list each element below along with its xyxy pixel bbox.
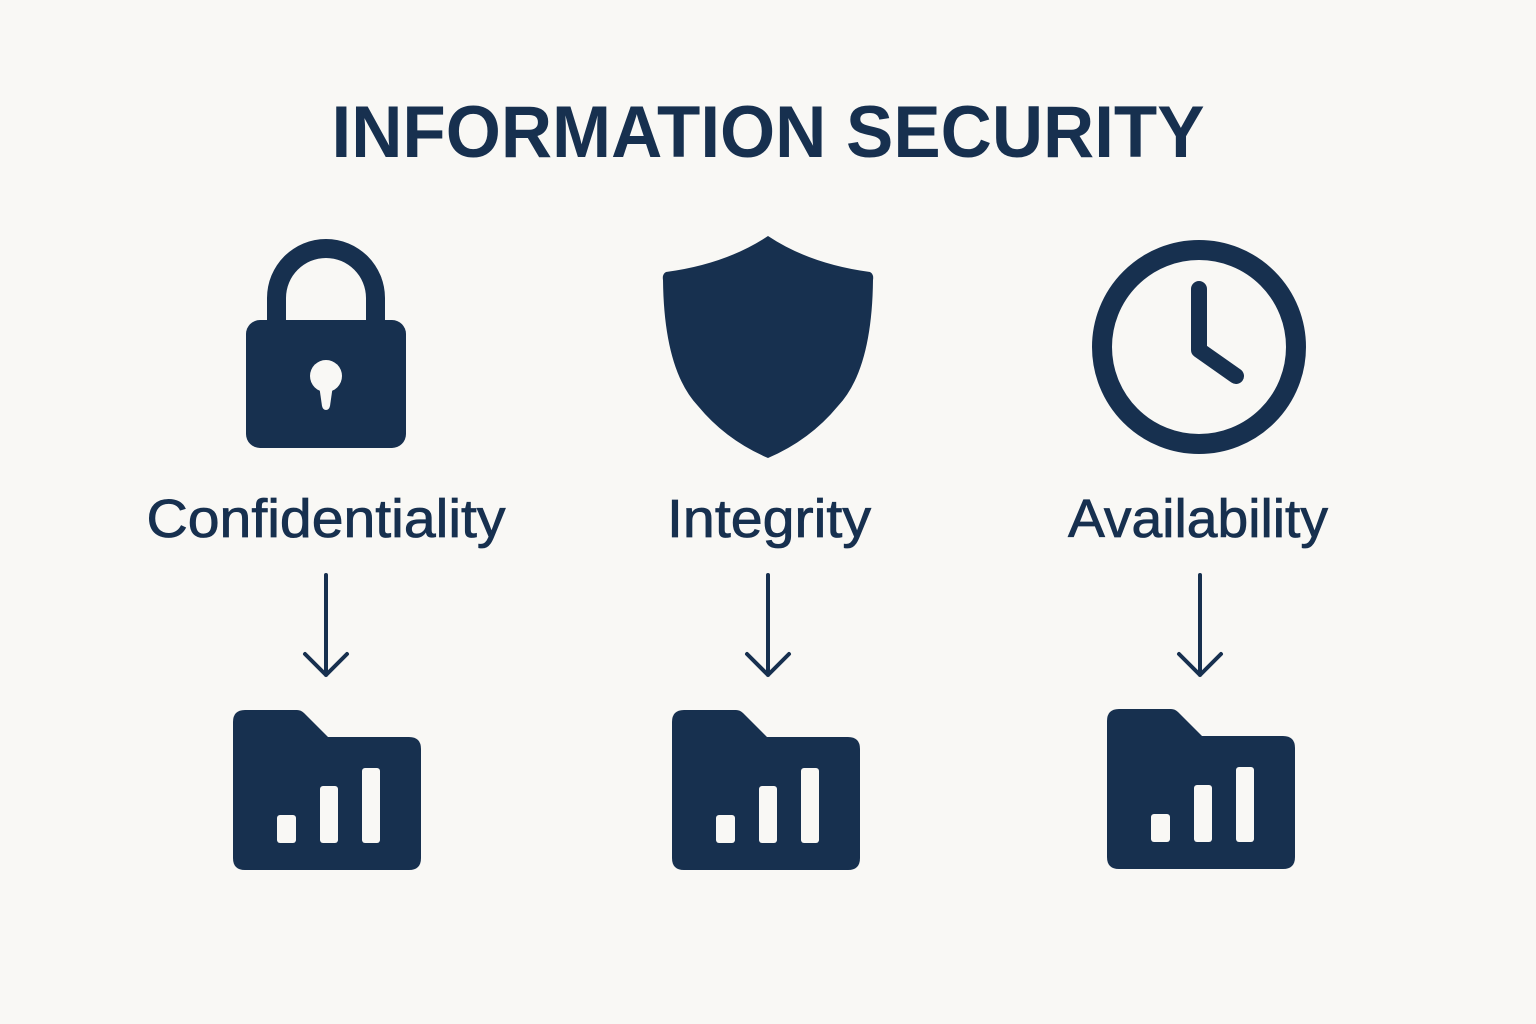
arrow: middle xyxy=(747,575,789,675)
arrow: left xyxy=(305,575,347,675)
icon: shield xyxy=(663,236,873,458)
icon: padlock xyxy=(246,239,406,448)
icon: folder left xyxy=(233,710,421,870)
icon: folder middle xyxy=(672,710,860,870)
label: Confidentiality: Confidentiality xyxy=(146,489,505,549)
label: Integrity: Integrity xyxy=(667,489,871,549)
arrow: right xyxy=(1179,575,1221,675)
icon: folder right xyxy=(1107,709,1295,869)
label: Availability: Availability xyxy=(1068,489,1328,549)
icon: clock xyxy=(1102,250,1296,444)
title: INFORMATION SECURITY xyxy=(332,92,1204,173)
